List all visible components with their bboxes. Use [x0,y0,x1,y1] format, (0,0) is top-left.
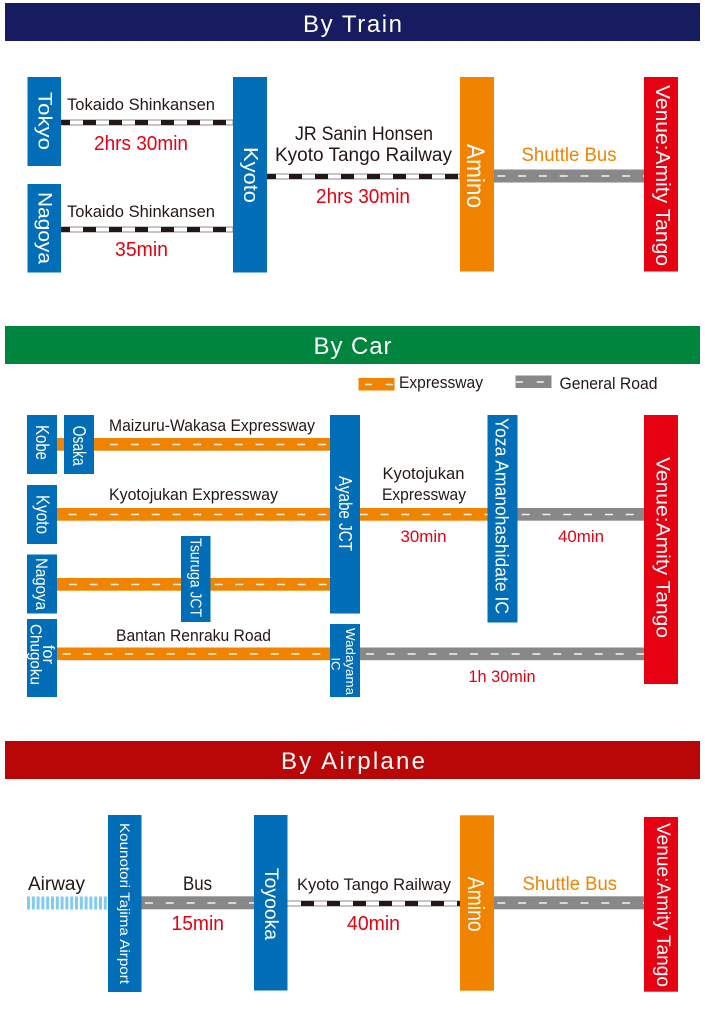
box: for Chugoku [26,619,58,697]
venue: Amity Tango: Venue:Amity Tango [652,823,673,987]
station: Kyoto [233,77,267,272]
label: Shuttle Bus: Shuttle Bus [522,145,616,166]
road: shuttle bus [494,896,644,909]
box: Ayabe JCT [330,415,360,614]
station: Tokyo: Tokyo [34,92,54,150]
label: Tokaido Shinkansen: Tokaido Shinkansen [67,95,215,114]
box: Wadayama IC [328,624,360,697]
heading: By Airplane [5,741,700,779]
box: Wadayama IC: IC [328,658,342,671]
label: Maizuru-Wakasa Expressway: Maizuru-Wakasa Expressway [109,416,315,435]
venue: Amity Tango: Venue:Amity Tango [652,457,672,638]
box: Tsuruga JCT: Tsuruga JCT [186,538,204,617]
label: Tokaido Shinkansen: Tokaido Shinkansen [67,202,215,221]
label: Kyoto Tango Railway: Kyoto Tango Railway [297,875,451,894]
rail line: Tokyo to Kyoto [61,120,233,125]
box: Kyoto [27,485,57,544]
label: Shuttle Bus: Shuttle Bus [522,874,617,895]
label: Expressway: Expressway [382,485,466,504]
box: Tsuruga JCT [181,536,210,622]
label: Airway: Airway [28,874,85,895]
box: Kobe [27,415,57,474]
time: 35min: 35min [115,239,168,261]
box: Osaka: Osaka [69,426,89,466]
road: shuttle bus [494,170,644,182]
heading: By Car: By Car [314,333,392,360]
rail line: Nagoya to Kyoto [61,227,233,232]
box: Nagoya: Nagoya [32,558,51,610]
station: Kyoto: Kyoto [239,147,261,203]
venue: Amity Tango: Venue:Amity Tango [651,85,673,266]
label: Bantan Renraku Road: Bantan Renraku Road [116,626,271,645]
box: Kounotori Tajima Airport [108,815,142,992]
time: 30min: 30min [400,527,446,546]
box: Nagoya [27,554,57,614]
label: JR Sanin Honsen: JR Sanin Honsen [295,124,433,145]
box: Wadayama IC: Wadayama [343,628,358,696]
heading: By Car [5,326,700,364]
heading: By Train: By Train [303,11,402,38]
station: Nagoya [28,184,61,272]
box: Yoza Amanohashidate IC: Yoza Amanohashidate IC [492,418,512,614]
station: Amino [460,77,494,272]
time: 40min: 40min [347,913,400,935]
label: Kyotojukan: Kyotojukan [382,464,464,483]
station: Tokyo [28,77,61,166]
station: Amino [460,815,494,991]
panel: by airplane [27,815,678,992]
label: Bus: Bus [183,874,212,895]
venue: Amity Tango [644,77,678,272]
panel: by car [26,415,678,697]
box: Osaka [64,415,94,474]
legend: general road: General Road [560,374,658,393]
legend [358,373,658,393]
label: Kyoto Tango Railway: Kyoto Tango Railway [275,145,452,166]
box: Toyooka [254,815,288,990]
box: Yoza Amanohashidate IC [488,415,518,622]
airway: dotted air route [27,896,108,910]
station: Nagoya: Nagoya [34,192,54,264]
station: Amino: Amino [463,877,489,932]
road: Kyotojukan Expressway [57,508,488,521]
road: Bantan Renraku Road [57,648,330,660]
venue: Amity Tango [644,415,678,684]
time: 1h 30min: 1h 30min [468,667,536,686]
rail line: Kyoto to Amino [267,174,460,179]
heading: By Airplane: By Airplane [281,748,425,775]
box: for Chugoku: for [39,645,58,664]
road: Yoza to venue [517,508,644,521]
road: bus [141,896,254,909]
station: Amino: Amino [461,144,489,208]
road: Maizuru-Wakasa Expressway [57,438,330,451]
time: 15min: 15min [172,913,224,935]
legend: expressway [358,373,483,392]
label: Kyotojukan Expressway: Kyotojukan Expressway [109,485,278,504]
venue: Amity Tango [644,817,678,992]
time: 2hrs 30min: 2hrs 30min [316,186,410,208]
road: Nagoya to Ayabe [57,578,330,591]
legend: expressway: Expressway [399,373,483,392]
time: 2hrs 30min: 2hrs 30min [94,133,188,155]
panel: by train [28,77,678,272]
box: for Chugoku: Chugoku [26,624,44,685]
legend: general road [516,374,658,393]
box: Toyooka: Toyooka [260,868,281,940]
rail line: Toyooka to Amino [287,901,460,906]
road: Wadayama to venue [360,648,644,660]
heading: By Train [5,3,700,41]
box: Kounotori Tajima Airport: Kounotori Tajima Airport [117,823,133,984]
box: Kobe: Kobe [32,425,52,460]
box: Kyoto: Kyoto [32,495,52,534]
box: Ayabe JCT: Ayabe JCT [335,476,355,551]
time: 40min: 40min [558,527,604,546]
